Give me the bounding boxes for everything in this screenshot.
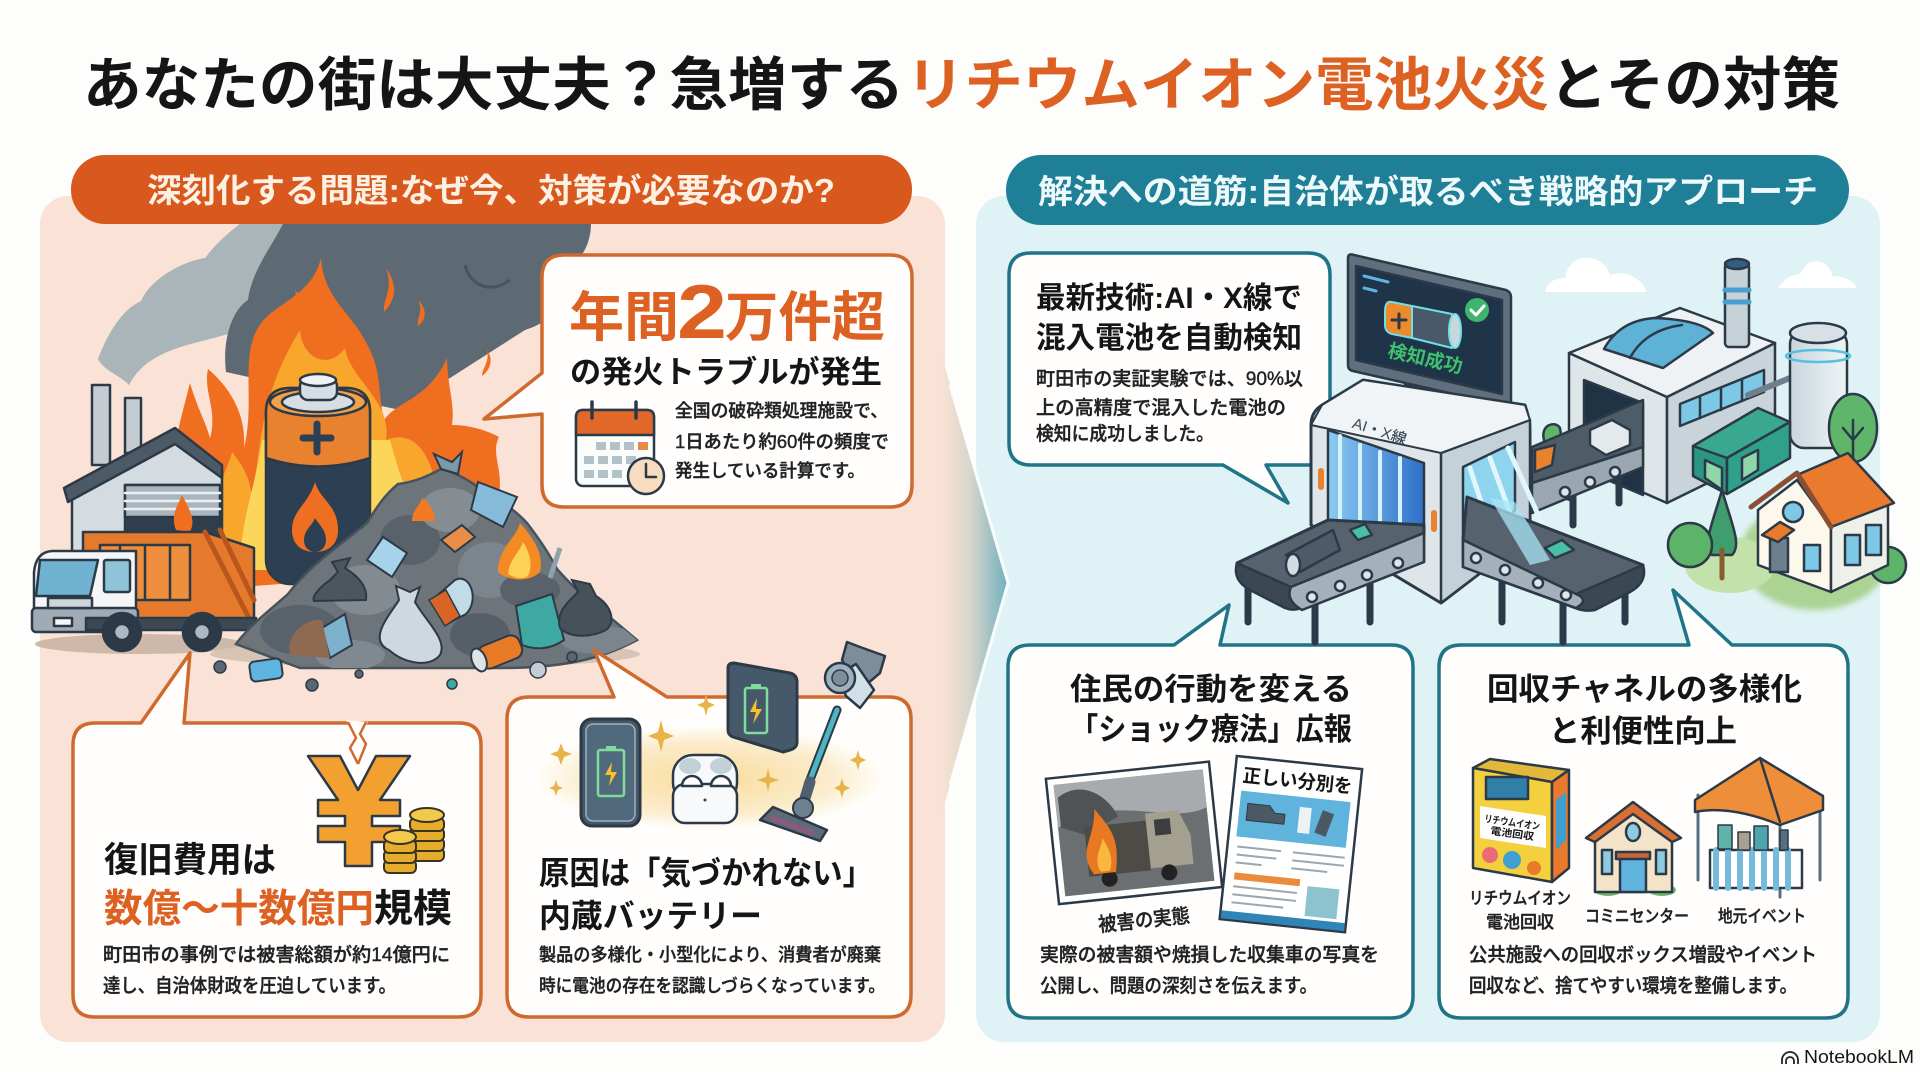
icon: calendar and clock [576, 402, 664, 494]
description: 1日あたり約60件の頻度で [675, 432, 889, 452]
description [1469, 944, 1817, 997]
heading [1487, 672, 1802, 749]
icon: event tent [1695, 758, 1823, 897]
icon: collection box: リチウムイオン [1484, 813, 1541, 833]
icon: cracked yen and coins [308, 720, 444, 873]
house and trees [1668, 453, 1906, 610]
heading: 混入電池を自動検知 [1036, 322, 1302, 355]
factory [1569, 259, 1775, 503]
photo: burnt truck [1046, 762, 1222, 904]
heading pill: solution [1006, 155, 1849, 225]
description: 時に電池の存在を認識しづらくなっています。 [539, 976, 885, 996]
description [539, 944, 885, 996]
back tree right [1829, 394, 1877, 470]
heading: 内蔵バッテリー [539, 898, 762, 934]
heading: と利便性向上 [1549, 714, 1737, 749]
description: 公共施設への回収ボックス増設やイベント [1469, 944, 1817, 966]
panel: left problem background [40, 196, 945, 1042]
flyer: 正しい分別を [1242, 765, 1353, 798]
label: 地元イベント [1718, 907, 1806, 926]
garbage truck [32, 530, 256, 654]
headline figure [569, 270, 885, 355]
title: リチウムイオン電池火災 [906, 53, 1549, 118]
description: 上の高精度で混入した電池の [1036, 397, 1286, 419]
scanner machine: AI・X線 [1350, 415, 1409, 448]
back conveyor [1532, 400, 1643, 525]
heading: 最新技術:AI・X線で [1036, 282, 1302, 315]
left conveyor [1236, 520, 1424, 642]
headline figure: 2 [677, 270, 727, 355]
heading: 住民の行動を変える [1070, 672, 1352, 707]
icon: earbuds case [673, 755, 737, 823]
description [675, 401, 889, 481]
title [83, 53, 1840, 118]
flames [168, 258, 500, 590]
caption: 被害の実態 [1097, 904, 1191, 937]
heading [539, 855, 873, 934]
callout: AI X-ray [1009, 253, 1330, 503]
illustration: AI X-ray sorting plant [1236, 254, 1906, 642]
flyer [1220, 756, 1362, 932]
description: 回収など、捨てやすい環境を整備します。 [1469, 975, 1797, 997]
description: 検知に成功しました。 [1036, 423, 1214, 445]
description: 発生している計算です。 [675, 461, 865, 481]
waste pile [210, 452, 640, 691]
description: 製品の多様化・小型化により、消費者が廃棄 [539, 944, 881, 965]
clouds [1545, 258, 1857, 292]
description [1040, 944, 1379, 997]
heading: 規模 [374, 888, 452, 931]
icon: collection box: 電池回収 [1490, 824, 1535, 843]
headline figure: 年間 [569, 288, 679, 348]
callout: recovery cost [73, 653, 481, 1017]
description: 実際の被害額や焼損した収集車の写真を [1040, 944, 1379, 966]
label: 電池回収 [1486, 913, 1554, 932]
heading: 原因は「気づかれない」 [539, 855, 873, 891]
icon: collection box [1473, 759, 1569, 882]
monitor [1348, 254, 1511, 410]
heading pill: solution: 解決への道筋:自治体が取るべき戦略的アプローチ [1038, 173, 1818, 210]
icon: community center [1586, 802, 1681, 896]
battery [266, 374, 370, 584]
subheading: の発火トラブルが発生 [570, 355, 882, 390]
panel: right solution background [976, 196, 1880, 1042]
smoke [98, 220, 591, 410]
description: 公開し、問題の深刻さを伝えます。 [1040, 975, 1317, 997]
description: 町田市の事例では被害総額が約14億円に [103, 944, 450, 966]
back tree [1543, 424, 1570, 500]
chimneys [92, 385, 141, 465]
headline figure: 万件超 [725, 288, 885, 348]
description: 達し、自治体財政を圧迫しています。 [103, 975, 396, 997]
icon: power bank [728, 663, 797, 752]
warehouse [64, 428, 222, 560]
monitor: 検知成功 [1386, 339, 1465, 378]
sparkles [549, 694, 866, 798]
scanner machine [1311, 380, 1545, 603]
title: あなたの街は大丈夫？急増する [83, 53, 904, 118]
heading pill: problem: 深刻化する問題:なぜ今、対策が必要なのか? [147, 172, 835, 209]
callout: shock PR [1008, 605, 1413, 1018]
title: とその対策 [1549, 53, 1840, 118]
label: リチウムイオン [1469, 889, 1571, 908]
green bins [1693, 408, 1790, 494]
arrow: problem to solution [940, 350, 1008, 820]
logo: NotebookLM: NotebookLM [1804, 1047, 1914, 1067]
callout: 2万件 fires [484, 255, 912, 507]
heading pill: problem [71, 155, 912, 224]
heading: 復旧費用は [104, 841, 276, 880]
heading [1036, 282, 1302, 355]
heading: 数億〜十数億円 [104, 888, 374, 931]
tank [1748, 323, 1850, 448]
description: 全国の破砕類処理施設で、 [675, 401, 888, 421]
description [1036, 368, 1303, 445]
heading [104, 841, 452, 931]
heading [1070, 672, 1352, 747]
label [1469, 889, 1571, 932]
callout: hidden batteries [507, 642, 911, 1017]
description [103, 944, 450, 997]
icon: cordless vacuum [760, 642, 885, 841]
callout: collection channels [1439, 590, 1848, 1018]
glow [535, 726, 885, 830]
illustration: burning battery waste scene [32, 220, 640, 691]
description: 町田市の実証実験では、90%以 [1036, 368, 1303, 390]
heading: 回収チャネルの多様化 [1487, 672, 1802, 707]
label: コミニセンター [1585, 907, 1689, 926]
heading: 「ショック療法」広報 [1070, 712, 1352, 747]
right conveyor [1463, 497, 1644, 642]
icon: smartphone [581, 719, 640, 826]
